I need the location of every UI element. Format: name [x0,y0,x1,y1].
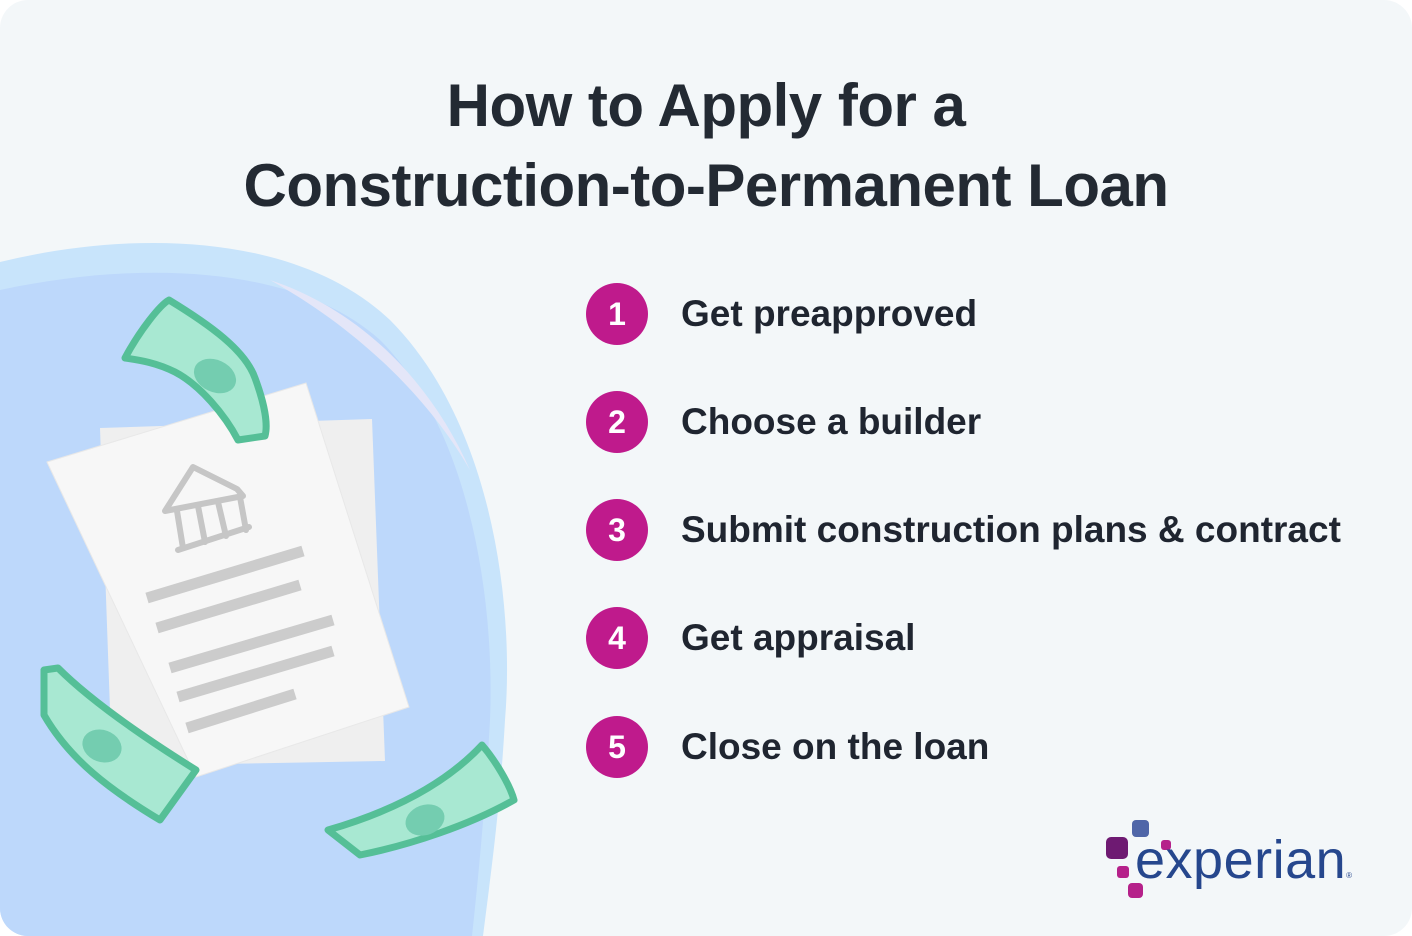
step 4: 4 [608,620,626,656]
step 4 [586,607,915,669]
logo: experian: experian® [1135,830,1353,890]
step 5: 5 [608,729,626,765]
title: How to Apply for a [447,72,965,139]
step 3: Submit construction plans & contract [681,509,1341,550]
money: bills [44,300,514,855]
step 1: 1 [608,296,626,332]
blob background [0,243,507,936]
title [244,72,1168,219]
step 3: 3 [608,512,626,548]
step 2 [586,391,981,453]
step 1: Get preapproved [681,293,977,334]
step 4: Get appraisal [681,617,915,658]
step 1 [586,283,977,345]
documents [47,383,409,777]
step 3 [586,499,1341,561]
step 2: 2 [608,404,626,440]
title: Construction-to-Permanent Loan [244,152,1168,219]
icon: bank [165,467,249,550]
logo: experian [1106,820,1353,898]
step 2: Choose a builder [681,401,981,442]
step 5 [586,716,989,778]
step 5: Close on the loan [681,726,989,767]
